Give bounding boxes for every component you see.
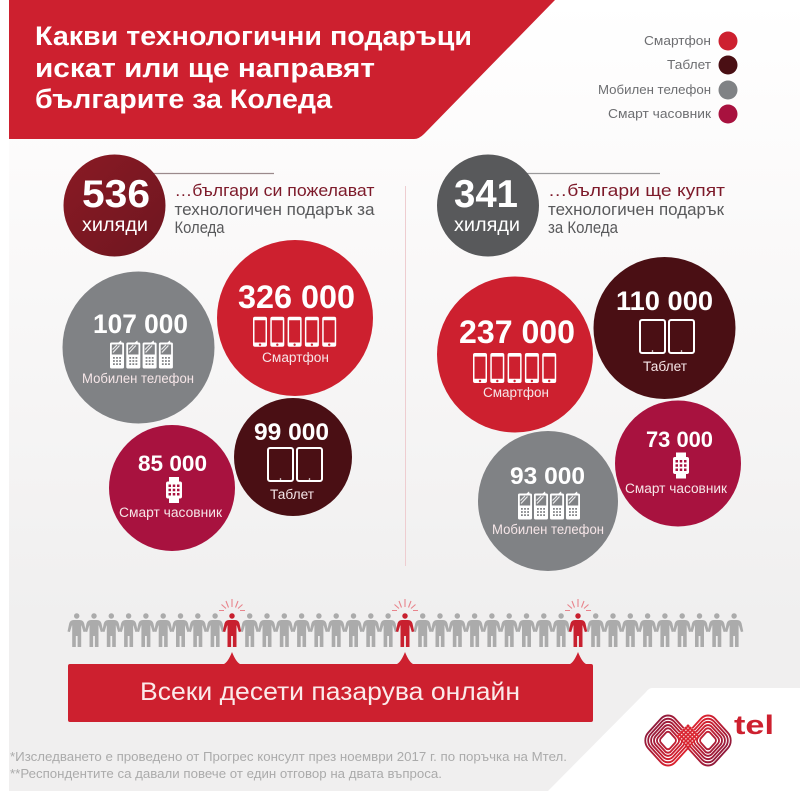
right summary: 341 thousand: …българи ще купят [548, 181, 725, 200]
bubble: buy smart watch 73 000: Смарт часовник [625, 481, 727, 496]
right summary: 341 thousand [437, 154, 725, 256]
logo: Mtel [641, 710, 774, 770]
right summary: 341 thousand: хиляди [454, 215, 520, 236]
bubble: wish mobile phone 107 000: Мобилен телефон [82, 371, 194, 386]
bubble: buy smartphone 237 000 [437, 276, 593, 432]
bubble: buy mobile phone 93 000 [478, 431, 618, 571]
icon: two tablets [268, 448, 322, 481]
right summary: 341 thousand: 341 [454, 173, 518, 216]
icon: two tablets [640, 320, 694, 353]
left summary: 536 thousand: 536 [82, 173, 150, 216]
right summary: 341 thousand: технологичен подарък [548, 200, 725, 219]
icon: smart watch [166, 477, 182, 503]
left summary: 536 thousand: технологичен подарък за [174, 200, 375, 219]
legend: Смартфон [644, 33, 711, 48]
legend: Мобилен телефон [598, 82, 711, 97]
header banner [9, 0, 555, 139]
bubble: wish tablet 99 000: 99 000 [254, 419, 329, 446]
footnotes: **Респондентите са давали повече от един отговор на двата въпроса. [10, 767, 442, 781]
icon: four mobile phones [110, 340, 173, 368]
legend [598, 32, 738, 124]
bubble: buy mobile phone 93 000: 93 000 [510, 463, 585, 490]
icon: four mobile phones [518, 492, 580, 520]
bubble: wish smart watch 85 000 [109, 425, 235, 551]
legend: Таблет [667, 57, 711, 72]
footnotes: *Изследването е проведено от Прогрес консулт през ноември 2017 г. по поръчка на Мтел. [10, 750, 567, 764]
bubble: wish smartphone 326 000: 326 000 [238, 279, 355, 315]
bubble: wish mobile phone 107 000 [62, 272, 214, 424]
bubble: buy tablet 110 000: Таблет [643, 359, 687, 374]
white logo corner panel [548, 688, 800, 791]
title: искат или ще направят [35, 53, 375, 83]
legend: Смарт часовник [608, 106, 711, 121]
callout bar [68, 652, 593, 722]
bubble: wish smartphone 326 000: Смартфон [262, 350, 329, 365]
title [35, 21, 472, 114]
callout bar: Всеки десети пазарува онлайн [140, 678, 520, 706]
bubble: buy smartphone 237 000: Смартфон [483, 385, 549, 400]
icon: five smartphones [253, 317, 336, 347]
title: Какви технологични подаръци [35, 21, 472, 51]
left summary: 536 thousand: …българи си пожелават [174, 181, 375, 200]
left summary: 536 thousand: хиляди [82, 215, 148, 236]
footnotes [10, 750, 567, 781]
bubble: wish tablet 99 000: Таблет [270, 487, 314, 502]
bubble: wish tablet 99 000 [234, 398, 352, 516]
logo wordmark: tel [734, 710, 774, 740]
icon: smart watch [673, 452, 689, 478]
bubble: buy mobile phone 93 000: Мобилен телефон [492, 522, 604, 537]
bubble: wish smart watch 85 000: 85 000 [138, 451, 207, 476]
bubble: buy tablet 110 000 [594, 257, 736, 399]
bubble: buy smart watch 73 000: 73 000 [646, 427, 713, 452]
bubble: wish mobile phone 107 000: 107 000 [93, 309, 188, 339]
right summary: 341 thousand: за Коледа [548, 218, 618, 237]
row of people: every tenth highlighted [68, 599, 743, 647]
logo mark [641, 711, 735, 770]
bubble: buy smart watch 73 000 [615, 400, 741, 526]
left summary: 536 thousand: Коледа [174, 218, 225, 237]
icon: five smartphones [473, 353, 556, 383]
bubble: buy smartphone 237 000: 237 000 [459, 314, 575, 350]
bubble: wish smart watch 85 000: Смарт часовник [119, 505, 222, 520]
bubble: wish smartphone 326 000 [217, 240, 373, 396]
left summary: 536 thousand [64, 154, 375, 256]
bubble: buy tablet 110 000: 110 000 [616, 286, 713, 316]
title: българите за Коледа [35, 84, 333, 114]
